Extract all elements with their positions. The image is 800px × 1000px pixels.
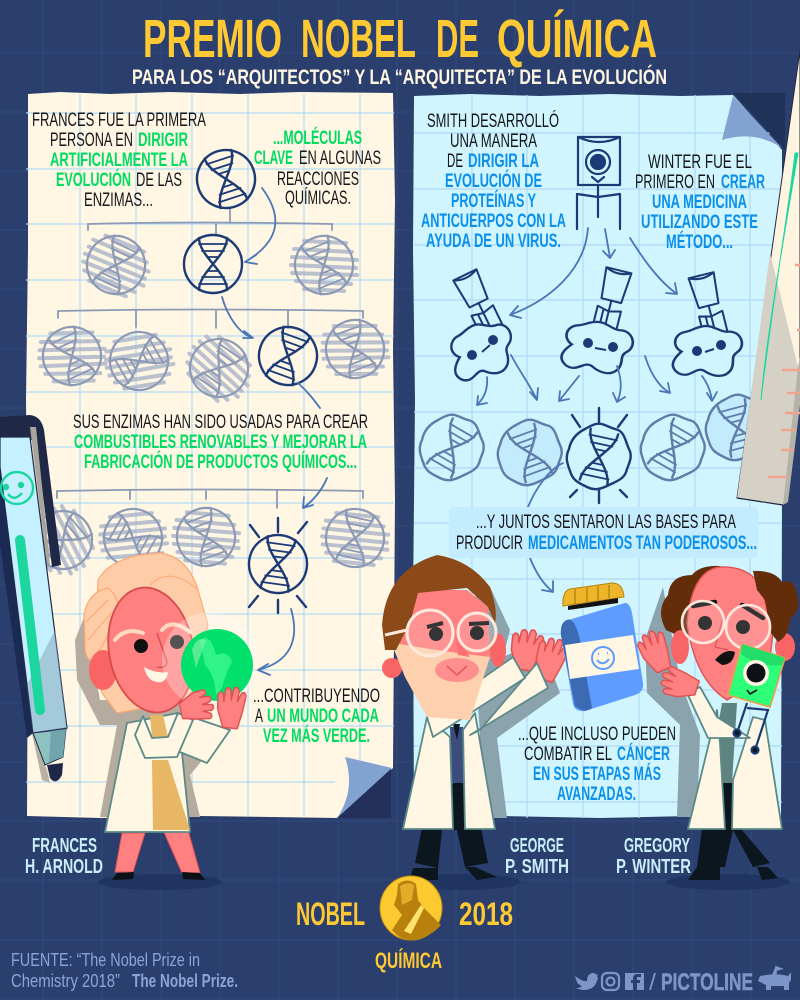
- infected bacteria: [448, 267, 743, 382]
- stethoscope: [734, 703, 768, 754]
- name: George P. Smith: [505, 835, 569, 878]
- text: enzyme uses: FABRICACIÓN DE PRODUCTOS QUÍMICOS...: [84, 451, 357, 473]
- face: [89, 650, 117, 690]
- text: Arnold intro: [32, 110, 206, 211]
- ruler markings: [761, 153, 800, 477]
- pen shadow: [27, 710, 50, 783]
- icon: smiley: [592, 647, 614, 669]
- diagram: directed evolution of enzymes: [22, 142, 392, 675]
- antibodies: [420, 395, 770, 503]
- arrows: [477, 228, 717, 592]
- body: [561, 603, 643, 711]
- icon: twitter: [575, 973, 598, 990]
- source: [11, 950, 238, 991]
- name: Gregory P. Winter: P. WINTER: [616, 856, 691, 878]
- pen clip: [0, 415, 61, 567]
- text: Smith intro: SMITH DESARROLLÓ: [427, 110, 559, 132]
- hands: [634, 627, 701, 703]
- hair: [382, 555, 496, 650]
- source: The Nobel Prize.: [132, 971, 238, 991]
- ground shadow: [397, 874, 521, 890]
- character: George P. Smith: [382, 555, 571, 890]
- title: PREMIO: [143, 9, 282, 69]
- text: key molecules: CLAVE: [254, 148, 293, 169]
- text: Winter intro: [635, 152, 765, 253]
- text: Smith intro: PROTEÍNAS Y: [451, 190, 536, 212]
- text: enzyme uses: SUS ENZIMAS HAN SIDO USADAS PARA CREAR: [73, 412, 368, 433]
- text: key molecules: QUÍMICAS.: [285, 188, 351, 209]
- pen tip: [33, 729, 66, 765]
- Nobel badge: 2018: [459, 896, 513, 932]
- text: cancer: CÁNCER: [617, 743, 670, 765]
- text: powerful medicines: PRODUCIR: [456, 533, 523, 554]
- name: George P. Smith: P. SMITH: [505, 856, 569, 878]
- text: Smith intro: [421, 110, 566, 252]
- legs: [410, 783, 497, 880]
- name: Gregory P. Winter: GREGORY: [624, 835, 690, 857]
- ruler shadow: [737, 253, 800, 505]
- name: Frances H. Arnold: [25, 835, 103, 878]
- medicine bottle: [561, 583, 643, 711]
- source: Chemistry 2018”: [11, 971, 120, 991]
- title: QUÍMICA: [497, 9, 657, 69]
- text: greener world: VEZ MÁS VERDE.: [263, 725, 370, 747]
- text: Smith intro: DE: [447, 151, 463, 172]
- coat: [403, 717, 453, 829]
- name: Gregory P. Winter: [616, 835, 691, 878]
- title: [143, 9, 657, 69]
- Nobel badge: [296, 876, 513, 973]
- divider slash: [649, 973, 656, 990]
- name: George P. Smith: GEORGE: [510, 835, 564, 857]
- legs: [688, 783, 778, 880]
- text: Arnold intro: DIRIGIR: [138, 130, 188, 151]
- text: cancer: AVANZADAS.: [557, 784, 636, 805]
- hands: [507, 627, 571, 684]
- text: Smith intro: ANTICUERPOS CON LA: [421, 211, 566, 232]
- text: Arnold intro: ENZIMAS...: [84, 190, 153, 211]
- hands: [178, 686, 247, 729]
- text: enzyme uses: COMBUSTIBLES RENOVABLES Y MEJORAR LA: [74, 432, 367, 453]
- shadow on paper: [75, 615, 215, 817]
- panel: Smith and Winter paper: [413, 93, 785, 818]
- phage virus: [577, 137, 620, 229]
- text: Smith intro: DIRIGIR LA: [468, 151, 539, 172]
- character: Frances H. Arnold: [75, 553, 258, 890]
- selected enzymes: [184, 142, 325, 613]
- text: greener world: A: [255, 706, 263, 727]
- legs: [115, 830, 200, 873]
- head: [661, 566, 720, 640]
- text: Smith intro: UNA MANERA: [450, 131, 537, 152]
- ground shadow: [666, 874, 790, 890]
- text: Winter intro: PRIMERO EN: [635, 172, 715, 193]
- title: DE: [436, 9, 479, 69]
- text: key molecules: REACCIONES: [277, 169, 359, 190]
- label: [565, 635, 639, 679]
- text: greener world: UN MUNDO CADA: [267, 706, 379, 727]
- text: Arnold intro: ARTIFICIALMENTE LA: [50, 150, 188, 171]
- facial features: [115, 624, 190, 682]
- source: FUENTE: “The Nobel Prize in: [11, 950, 200, 970]
- text: key molecules: [254, 127, 381, 209]
- green card: [728, 644, 785, 707]
- shirt: [450, 727, 472, 783]
- text: greener world: [253, 686, 380, 747]
- coat: [688, 710, 725, 829]
- shirt: [708, 703, 737, 783]
- text: cancer: [518, 724, 676, 805]
- shadow on paper: [645, 587, 700, 817]
- text: cancer: ...QUE INCLUSO PUEDEN: [518, 724, 676, 745]
- tree brackets: [57, 208, 363, 508]
- diagram: phage display: [420, 137, 770, 592]
- text: Arnold intro: PERSONA EN: [50, 130, 133, 151]
- title: NOBEL: [301, 9, 416, 69]
- character: Gregory P. Winter: [634, 566, 798, 890]
- pen: [0, 415, 67, 783]
- callout band: [449, 507, 758, 558]
- text: Smith intro: AYUDA DE UN VIRUS.: [426, 231, 561, 252]
- icon: pig: [758, 965, 791, 990]
- glowing globe: [162, 612, 258, 708]
- icon: instagram: [602, 973, 619, 990]
- text: Smith intro: EVOLUCIÓN DE: [445, 170, 542, 192]
- text: Arnold intro: EVOLUCIÓN: [56, 169, 131, 191]
- facial features: [385, 610, 496, 682]
- text: key molecules: EN ALGUNAS: [299, 148, 381, 169]
- folded corner: [337, 757, 392, 818]
- brand: Pictoline social: PICTOLINE: [661, 969, 753, 996]
- head: [382, 658, 402, 678]
- text: Winter intro: WINTER FUE EL: [648, 152, 752, 173]
- pen stripe: [20, 540, 40, 710]
- hair: [95, 553, 208, 713]
- text: cancer: EN SUS ETAPAS MÁS: [533, 763, 661, 785]
- text: powerful medicines: [456, 512, 757, 554]
- text: Winter intro: MÉTODO...: [666, 231, 733, 253]
- text: greener world: ...CONTRIBUYENDO: [253, 686, 380, 707]
- arrows: [222, 188, 327, 675]
- icon: medal: [380, 876, 442, 940]
- facial features: [682, 601, 770, 665]
- brand: Pictoline social: [575, 965, 791, 996]
- icon: smiley: [1, 472, 33, 504]
- coat: [105, 713, 190, 832]
- folded corner: [722, 93, 785, 150]
- name: Frances H. Arnold: H. ARNOLD: [25, 856, 103, 878]
- text: cancer: COMBATIR EL: [524, 744, 612, 765]
- Nobel badge: QUÍMICA: [375, 948, 442, 973]
- panel: Arnold paper: [26, 92, 395, 818]
- discarded enzymes: [22, 226, 392, 582]
- ground shadow: [98, 874, 222, 890]
- pen body: [0, 437, 67, 733]
- shadow on paper: [470, 587, 560, 818]
- name: Frances H. Arnold: FRANCES: [32, 835, 97, 857]
- ruler: [737, 50, 800, 505]
- icon: facebook: [625, 973, 644, 990]
- cap: [563, 583, 624, 606]
- text: Winter intro: CREAR: [721, 172, 765, 193]
- Nobel badge: NOBEL: [296, 896, 365, 932]
- text: key molecules: ...MOLÉCULAS: [273, 127, 362, 149]
- text: enzyme uses: [73, 412, 368, 473]
- text: Arnold intro: FRANCES FUE LA PRIMERA: [32, 110, 206, 131]
- text: Arnold intro: DE LAS: [136, 170, 182, 191]
- text: Winter intro: UNA MEDICINA: [652, 192, 747, 213]
